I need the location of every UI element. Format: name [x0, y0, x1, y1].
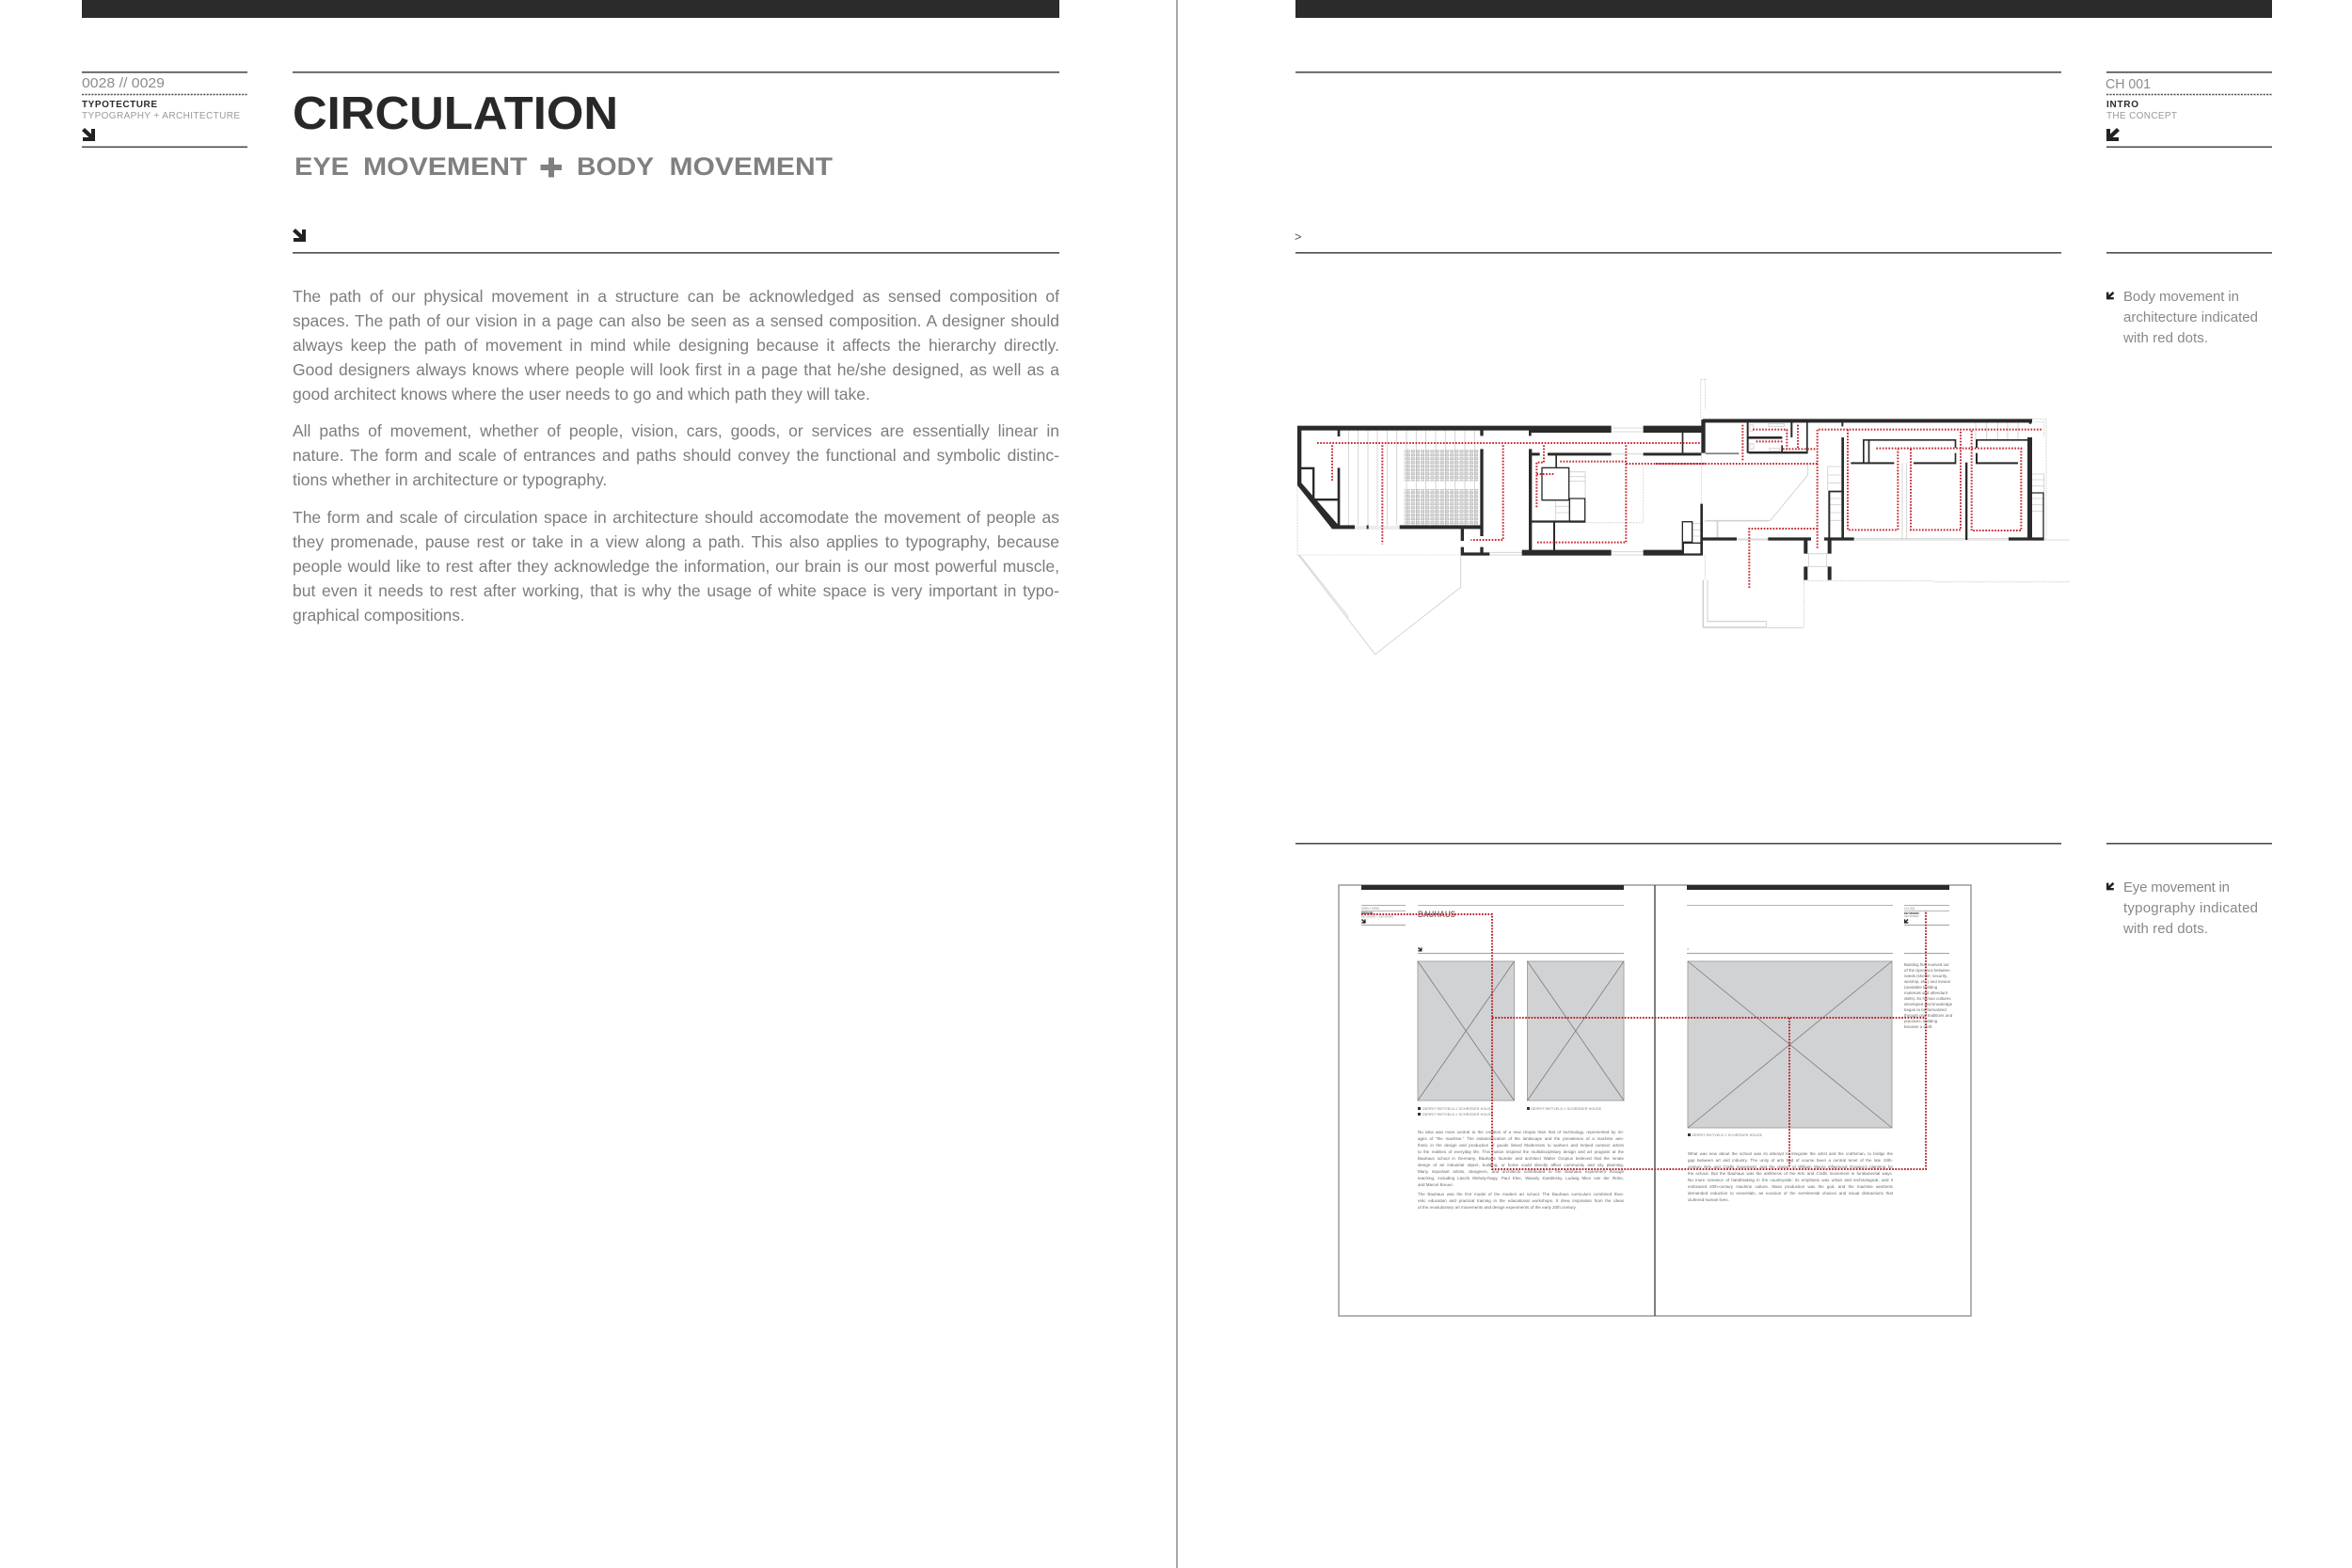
- subtitle: BODY: [577, 152, 654, 181]
- mini article left: and Marcel Breuer.: [1418, 1182, 1454, 1187]
- right sidebar header: [2106, 71, 2272, 148]
- mini article left: to the realities of everyday life. This notion inspired the multidisciplinary design and art program at the: [1418, 1149, 1624, 1154]
- mini article right: century Arts and Crafts movement, and the classic of William Morris influenced Gropius's planning for: [1688, 1164, 1893, 1169]
- mini side note: began to be formalized: [1904, 1007, 1947, 1012]
- light gray site and detail lines: [1703, 419, 2070, 627]
- mini article right: demanded reduction to essentials, an excision of the sentimental choices and visual distractions that: [1688, 1191, 1893, 1196]
- body text: circulation essay: [293, 287, 1059, 625]
- left sidebar header: 0028 // 0029: [82, 75, 165, 91]
- left page top bar: [82, 0, 1059, 18]
- mini article left: Bauhaus school in Germany. Bauhaus founder and architect Walter Gropius believed that the innate: [1418, 1156, 1624, 1161]
- paragraph three: graphical compositions.: [293, 606, 465, 625]
- spread outline: [1339, 885, 1971, 1316]
- icon: arrow south-west: [2106, 128, 2120, 141]
- mini side note: practices, building: [1904, 1019, 1937, 1023]
- right page top rule: [1295, 71, 2061, 73]
- image placeholder B: [1528, 961, 1624, 1101]
- red dots: west circulation: [1317, 443, 1706, 544]
- caption: eye movement: [2106, 879, 2258, 937]
- mini article left: [1418, 1130, 1624, 1210]
- image captions: GERRIT RIETVELD // SCHRÖDER HOUSE: [1531, 1107, 1602, 1111]
- paragraph two: [293, 421, 1059, 489]
- mini article left: No idea was more central to the creation of a new Utopia than that of technology, represented by im-: [1418, 1130, 1624, 1134]
- sidebar rule two: [2106, 843, 2272, 845]
- sidebar rule one: [2106, 252, 2272, 254]
- mini side note: [1904, 962, 1952, 1029]
- mini side note: became a craft.: [1904, 1024, 1932, 1029]
- right page section rule: [1295, 252, 2061, 254]
- mini side note: skills). As human cultures: [1904, 996, 1951, 1001]
- right page chevron marker: >: [1295, 230, 1302, 244]
- auditorium seats: [1405, 450, 1479, 525]
- paragraph one: good architect knows where the user needs to go and which path they will take.: [293, 385, 870, 404]
- mini side note: materials and attendant: [1904, 990, 1947, 995]
- paragraph two: tions whether in architecture or typography.: [293, 470, 607, 489]
- subtitle: MOVEMENT: [363, 152, 528, 181]
- mini article right: No more romance of handmaking in the countryside: its emphasis was urban and technological, and it: [1688, 1178, 1893, 1182]
- title: CIRCULATION: [293, 88, 618, 139]
- mini side note: developed and knowledge: [1904, 1002, 1952, 1006]
- mini article left: teaching, including László Moholy-Nagy, Paul Klee, Wassily Kandinsky, Ludwig Mies van der Rohe,: [1418, 1176, 1624, 1180]
- mini article left: thetic in the design and production of goods linked Modernists to workers and helped connect artists: [1418, 1143, 1624, 1148]
- title rule: [293, 71, 1059, 73]
- mini article right: cluttered human lives.: [1688, 1197, 1729, 1202]
- light gray site and detail lines: [1297, 379, 1769, 655]
- left sidebar header: TYPOGRAPHY + ARCHITECTURE: [82, 111, 240, 121]
- mini article right: [1688, 1151, 1893, 1202]
- paragraph three: but even it needs to rest after working, that is why the usage of white space is very important in typo-: [293, 581, 1059, 600]
- paragraph one: [293, 287, 1059, 404]
- mini left page header: BAUHAUS: [1418, 910, 1455, 919]
- mini side note: Building first evolved out: [1904, 962, 1949, 967]
- subtitle: EYE: [294, 152, 349, 181]
- image placeholder A: [1418, 961, 1515, 1101]
- caption: eye movement: with red dots.: [2122, 921, 2208, 937]
- image captions: GERRIT RIETVELD // SCHRÖDER HOUSE: [1422, 1107, 1494, 1111]
- walls: [1703, 419, 2044, 580]
- paragraph three: The form and scale of circulation space in architecture should accomodate the movement of people as: [293, 508, 1059, 527]
- red dots: eye movement path: [1361, 911, 1927, 1170]
- paragraph three: they promenade, pause rest or take in a view along a path. This also applies to typography, because: [293, 532, 1059, 551]
- mini right page header: >: [1687, 946, 1690, 951]
- center page divider: [1176, 0, 1178, 1568]
- caption: eye movement: Eye movement in: [2123, 879, 2230, 895]
- mini article left: of the revolutionary art movements and design experiments of the early 20th century.: [1418, 1205, 1577, 1210]
- mini left page header: 0090 // 0090: [1361, 907, 1379, 911]
- right page top bar: [1295, 0, 2272, 18]
- plan: west half: [1297, 379, 1769, 655]
- mini left page header: DESIGN: [1361, 911, 1374, 915]
- mini right page header: KEYWORD: [1904, 914, 1919, 918]
- paragraph three: people would like to rest after they acknowledge the information, our brain is our most powerful muscle,: [293, 557, 1059, 576]
- image captions: GERRIT RIETVELD // SCHRÖDER HOUSE: [1422, 1113, 1494, 1117]
- mini article left: ages of "the machine." The industrialization of the landscape and the prevalence of a machine aes-: [1418, 1136, 1624, 1141]
- mini article left: Many important artists, designers, and architects contributed to the Bauhaus experiment through: [1418, 1169, 1624, 1174]
- mini article left: retic education and practical training in the educational workshops. It drew inspiration from the ideas: [1418, 1198, 1624, 1203]
- paragraph one: spaces. The path of our vision in a page can also be seen as a sensed composition. A designer should: [293, 311, 1059, 330]
- image captions: GERRIT RIETVELD // SCHRÖDER HOUSE: [1692, 1133, 1763, 1137]
- mini right page header: CH 001: [1904, 907, 1915, 911]
- paragraph one: Good designers always knows where people will look first in a page that he/she designed, as well as a: [293, 360, 1059, 379]
- mini side note: needs (shelter, security,: [1904, 974, 1947, 978]
- paragraph two: nature. The form and scale of entrances and paths should convey the functional and symbolic distinc-: [293, 446, 1059, 465]
- mini article left: design of an industrial object, building, or home could directly affect community and city planning.: [1418, 1163, 1624, 1167]
- left sidebar header: [82, 71, 247, 148]
- paragraph one: always keep the path of movement in mind while designing because it affects the hierarchy directly.: [293, 336, 1059, 355]
- icon: plus: [540, 158, 562, 177]
- mini right page header: KEYWORD: [1904, 911, 1919, 915]
- caption: body movement: with red dots.: [2122, 330, 2208, 346]
- subtitle: [294, 152, 834, 181]
- mini left page header: [1361, 905, 1624, 954]
- mini side note: worship, etc.) and means: [1904, 979, 1950, 984]
- rule above spread: [1295, 843, 2061, 845]
- caption: body movement: [2106, 289, 2258, 346]
- image placeholder C: [1688, 961, 1892, 1128]
- left section rule: [293, 252, 1059, 254]
- miniature book spread with eye movement path: [1338, 884, 1972, 1317]
- caption: eye movement: typography indicated: [2123, 900, 2258, 916]
- caption: body movement: Body movement in: [2123, 289, 2239, 305]
- plan: east half: [1656, 419, 2070, 627]
- paragraph two: All paths of movement, whether of people, vision, cars, goods, or services are essentially linear in: [293, 421, 1059, 440]
- mini side note: through oral traditions and: [1904, 1013, 1952, 1018]
- paragraph three: [293, 508, 1059, 625]
- mini left page header: KEYWORD + KEYWORD: [1361, 914, 1394, 918]
- mini side note: (available building: [1904, 985, 1937, 990]
- paragraph one: The path of our physical movement in a structure can be acknowledged as sensed composition of: [293, 287, 1059, 306]
- subtitle: MOVEMENT: [670, 152, 834, 181]
- walls: [1297, 420, 1704, 556]
- image captions: [1418, 1107, 1763, 1137]
- floor plan with body movement path: [1297, 379, 2070, 655]
- mini top bars: [1361, 885, 1949, 890]
- left sidebar header: TYPOTECTURE: [82, 100, 157, 110]
- caption: body movement: architecture indicated: [2123, 309, 2258, 325]
- right sidebar header: INTRO: [2106, 100, 2138, 110]
- mini article right: What was new about the school was its attempt to integrate the artist and the craftsman, to bridge the: [1688, 1151, 1893, 1156]
- icon: arrow above left rule: [293, 229, 306, 242]
- right sidebar header: CH 001: [2106, 76, 2151, 92]
- mini article left: The Bauhaus was the first model of the modern art school. The Bauhaus curriculum combined theo-: [1418, 1192, 1624, 1196]
- spine: [1654, 885, 1656, 1316]
- mini article right: gap between art and industry. The unity of arts had of course been a central tenet of the late 19th-: [1688, 1158, 1893, 1163]
- icon: arrow south-east: [82, 128, 95, 141]
- spread frame, bars and image placeholders: [1338, 884, 1972, 1317]
- mini article right: the school. But the Bauhaus was the antithesis of the Arts and Crafts movement in fundamental ways.: [1688, 1171, 1893, 1176]
- mini side note: of the dynamics between: [1904, 968, 1950, 973]
- red dots: east circulation: [1656, 425, 2042, 588]
- mini article right: embraced 20th-century machine culture. Mass production was the god, and the machine aesthetic: [1688, 1184, 1893, 1189]
- mini right page header: [1687, 905, 1949, 954]
- right sidebar header: THE CONCEPT: [2106, 111, 2177, 121]
